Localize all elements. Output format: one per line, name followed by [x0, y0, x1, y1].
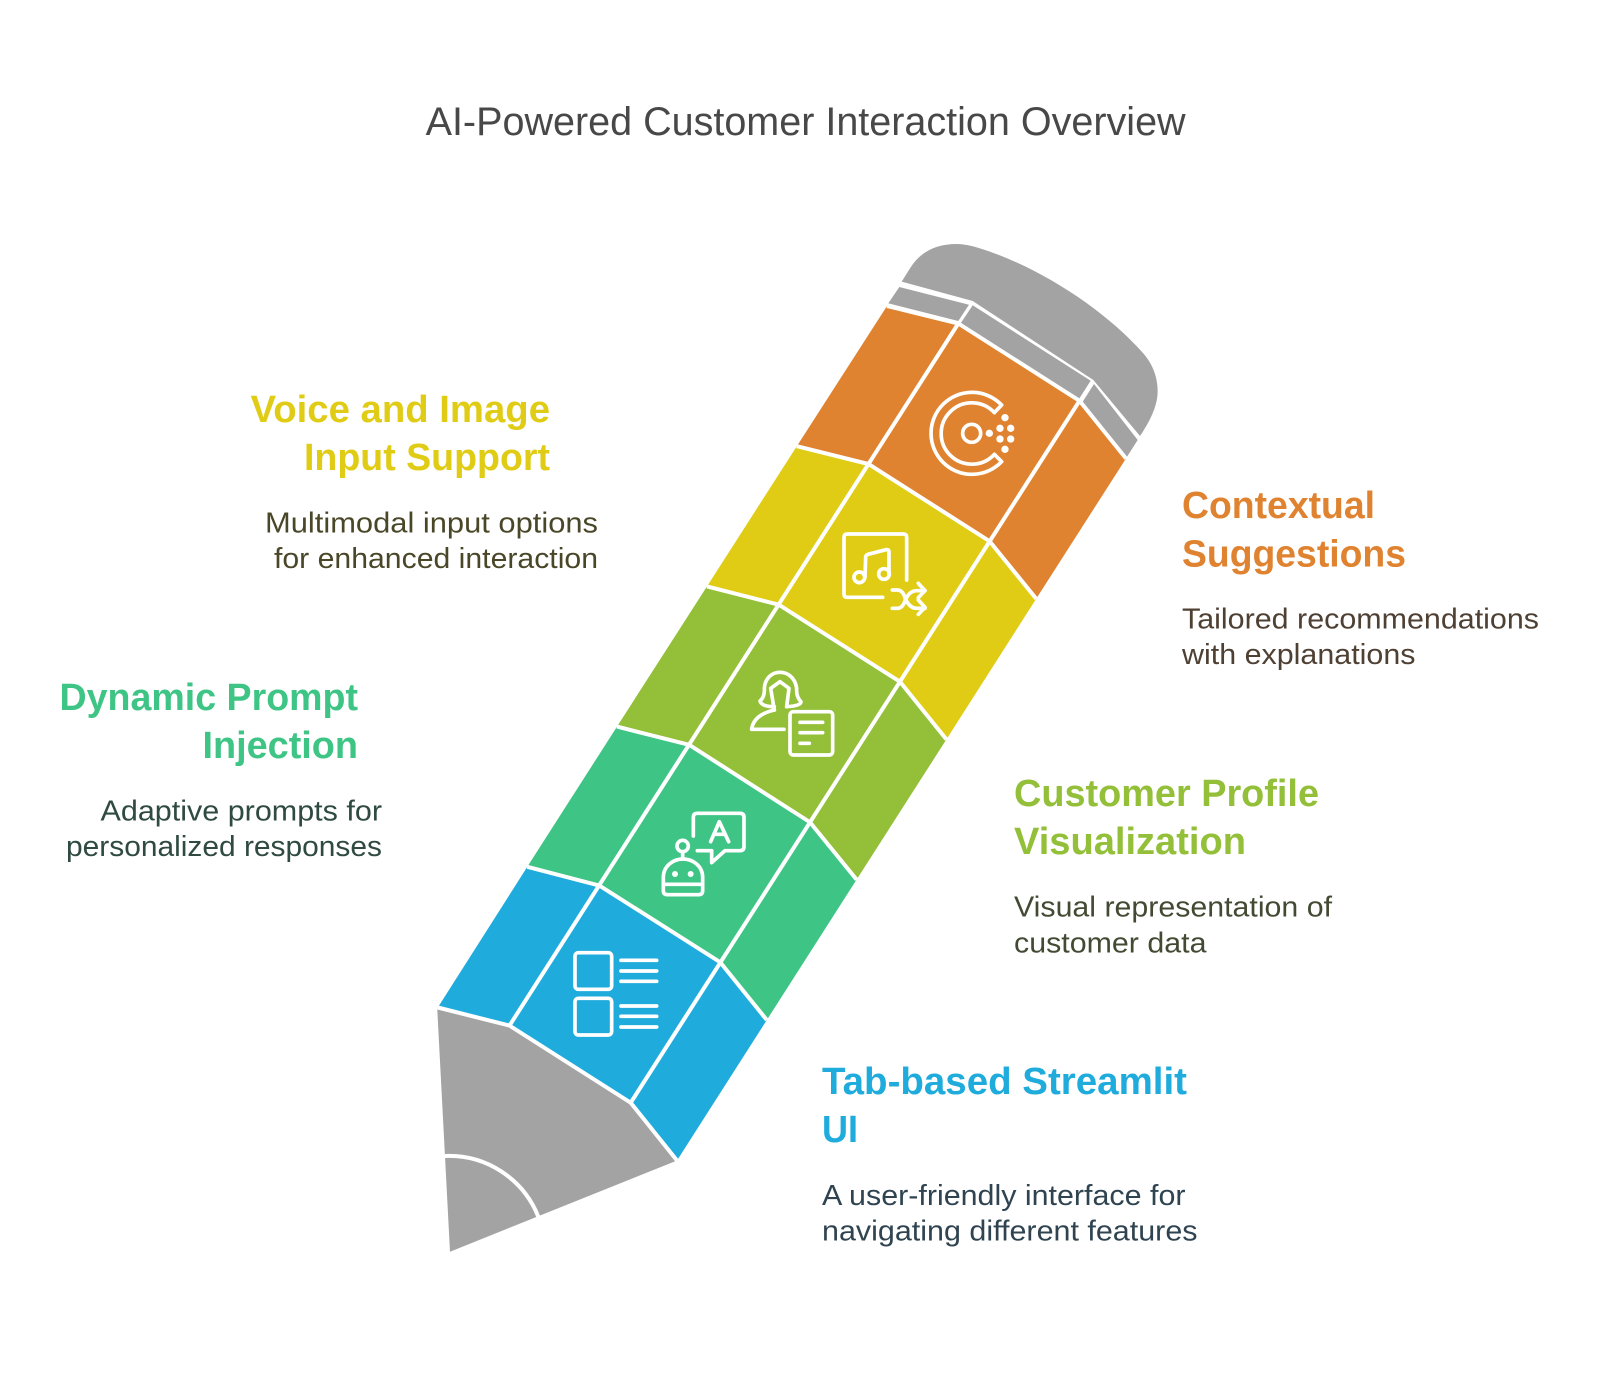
heading: Input Support: [304, 437, 550, 479]
description: Adaptive prompts for: [100, 796, 382, 828]
description: [265, 508, 598, 575]
icon: checklist: [575, 953, 657, 1035]
heading: [250, 389, 550, 479]
description: Tailored recommendations: [1182, 604, 1539, 636]
heading: Contextual: [1182, 485, 1375, 527]
heading: Customer Profile: [1014, 773, 1319, 815]
text block: customer profile visualization: [1014, 773, 1333, 960]
text block: contextual suggestions: [1181, 485, 1539, 671]
heading: UI: [822, 1109, 858, 1151]
segment: tab-based streamlit ui (blue): [438, 867, 767, 1160]
heading: Voice and Image: [250, 389, 550, 431]
description: customer data: [1014, 928, 1207, 960]
description: navigating different features: [822, 1216, 1198, 1248]
pencil cap: [902, 244, 1158, 436]
segment: dynamic prompt injection (teal): [527, 727, 857, 1020]
heading: [1182, 485, 1406, 576]
description: [1014, 892, 1333, 960]
description: [1181, 604, 1539, 671]
heading: Injection: [202, 725, 358, 767]
description: Multimodal input options: [265, 508, 598, 540]
description: for enhanced interaction: [274, 543, 598, 575]
title: AI-Powered Customer Interaction Overview: [426, 100, 1186, 144]
description: Visual representation of: [1014, 892, 1333, 924]
icon: robot with speech bubble: [663, 813, 744, 895]
description: personalized responses: [66, 831, 382, 863]
heading: [60, 677, 358, 767]
text block: dynamic prompt injection: [60, 677, 382, 863]
heading: [822, 1061, 1187, 1151]
text block: voice and image input support: [250, 389, 598, 575]
heading: [1014, 773, 1319, 863]
pencil tip: [437, 1008, 677, 1252]
heading: Tab-based Streamlit: [822, 1061, 1187, 1103]
icon: music note with shuffle: [844, 534, 925, 614]
description: [822, 1180, 1198, 1248]
description: [66, 796, 382, 863]
icon: person with document: [752, 672, 833, 755]
heading: Dynamic Prompt: [60, 677, 358, 719]
segment: customer profile visualization (green): [617, 586, 946, 880]
pencil diagram: [437, 244, 1158, 1252]
text block: tab-based streamlit ui: [822, 1061, 1198, 1248]
segment: contextual suggestions (orange): [797, 306, 1126, 599]
heading: Suggestions: [1182, 534, 1406, 576]
icon: C with dots: [931, 392, 1014, 474]
description: A user-friendly interface for: [822, 1180, 1186, 1212]
heading: Visualization: [1014, 821, 1246, 863]
pencil ferrule band: [888, 287, 1138, 457]
segment: voice and image input (yellow): [707, 446, 1036, 739]
description: with explanations: [1181, 639, 1416, 671]
